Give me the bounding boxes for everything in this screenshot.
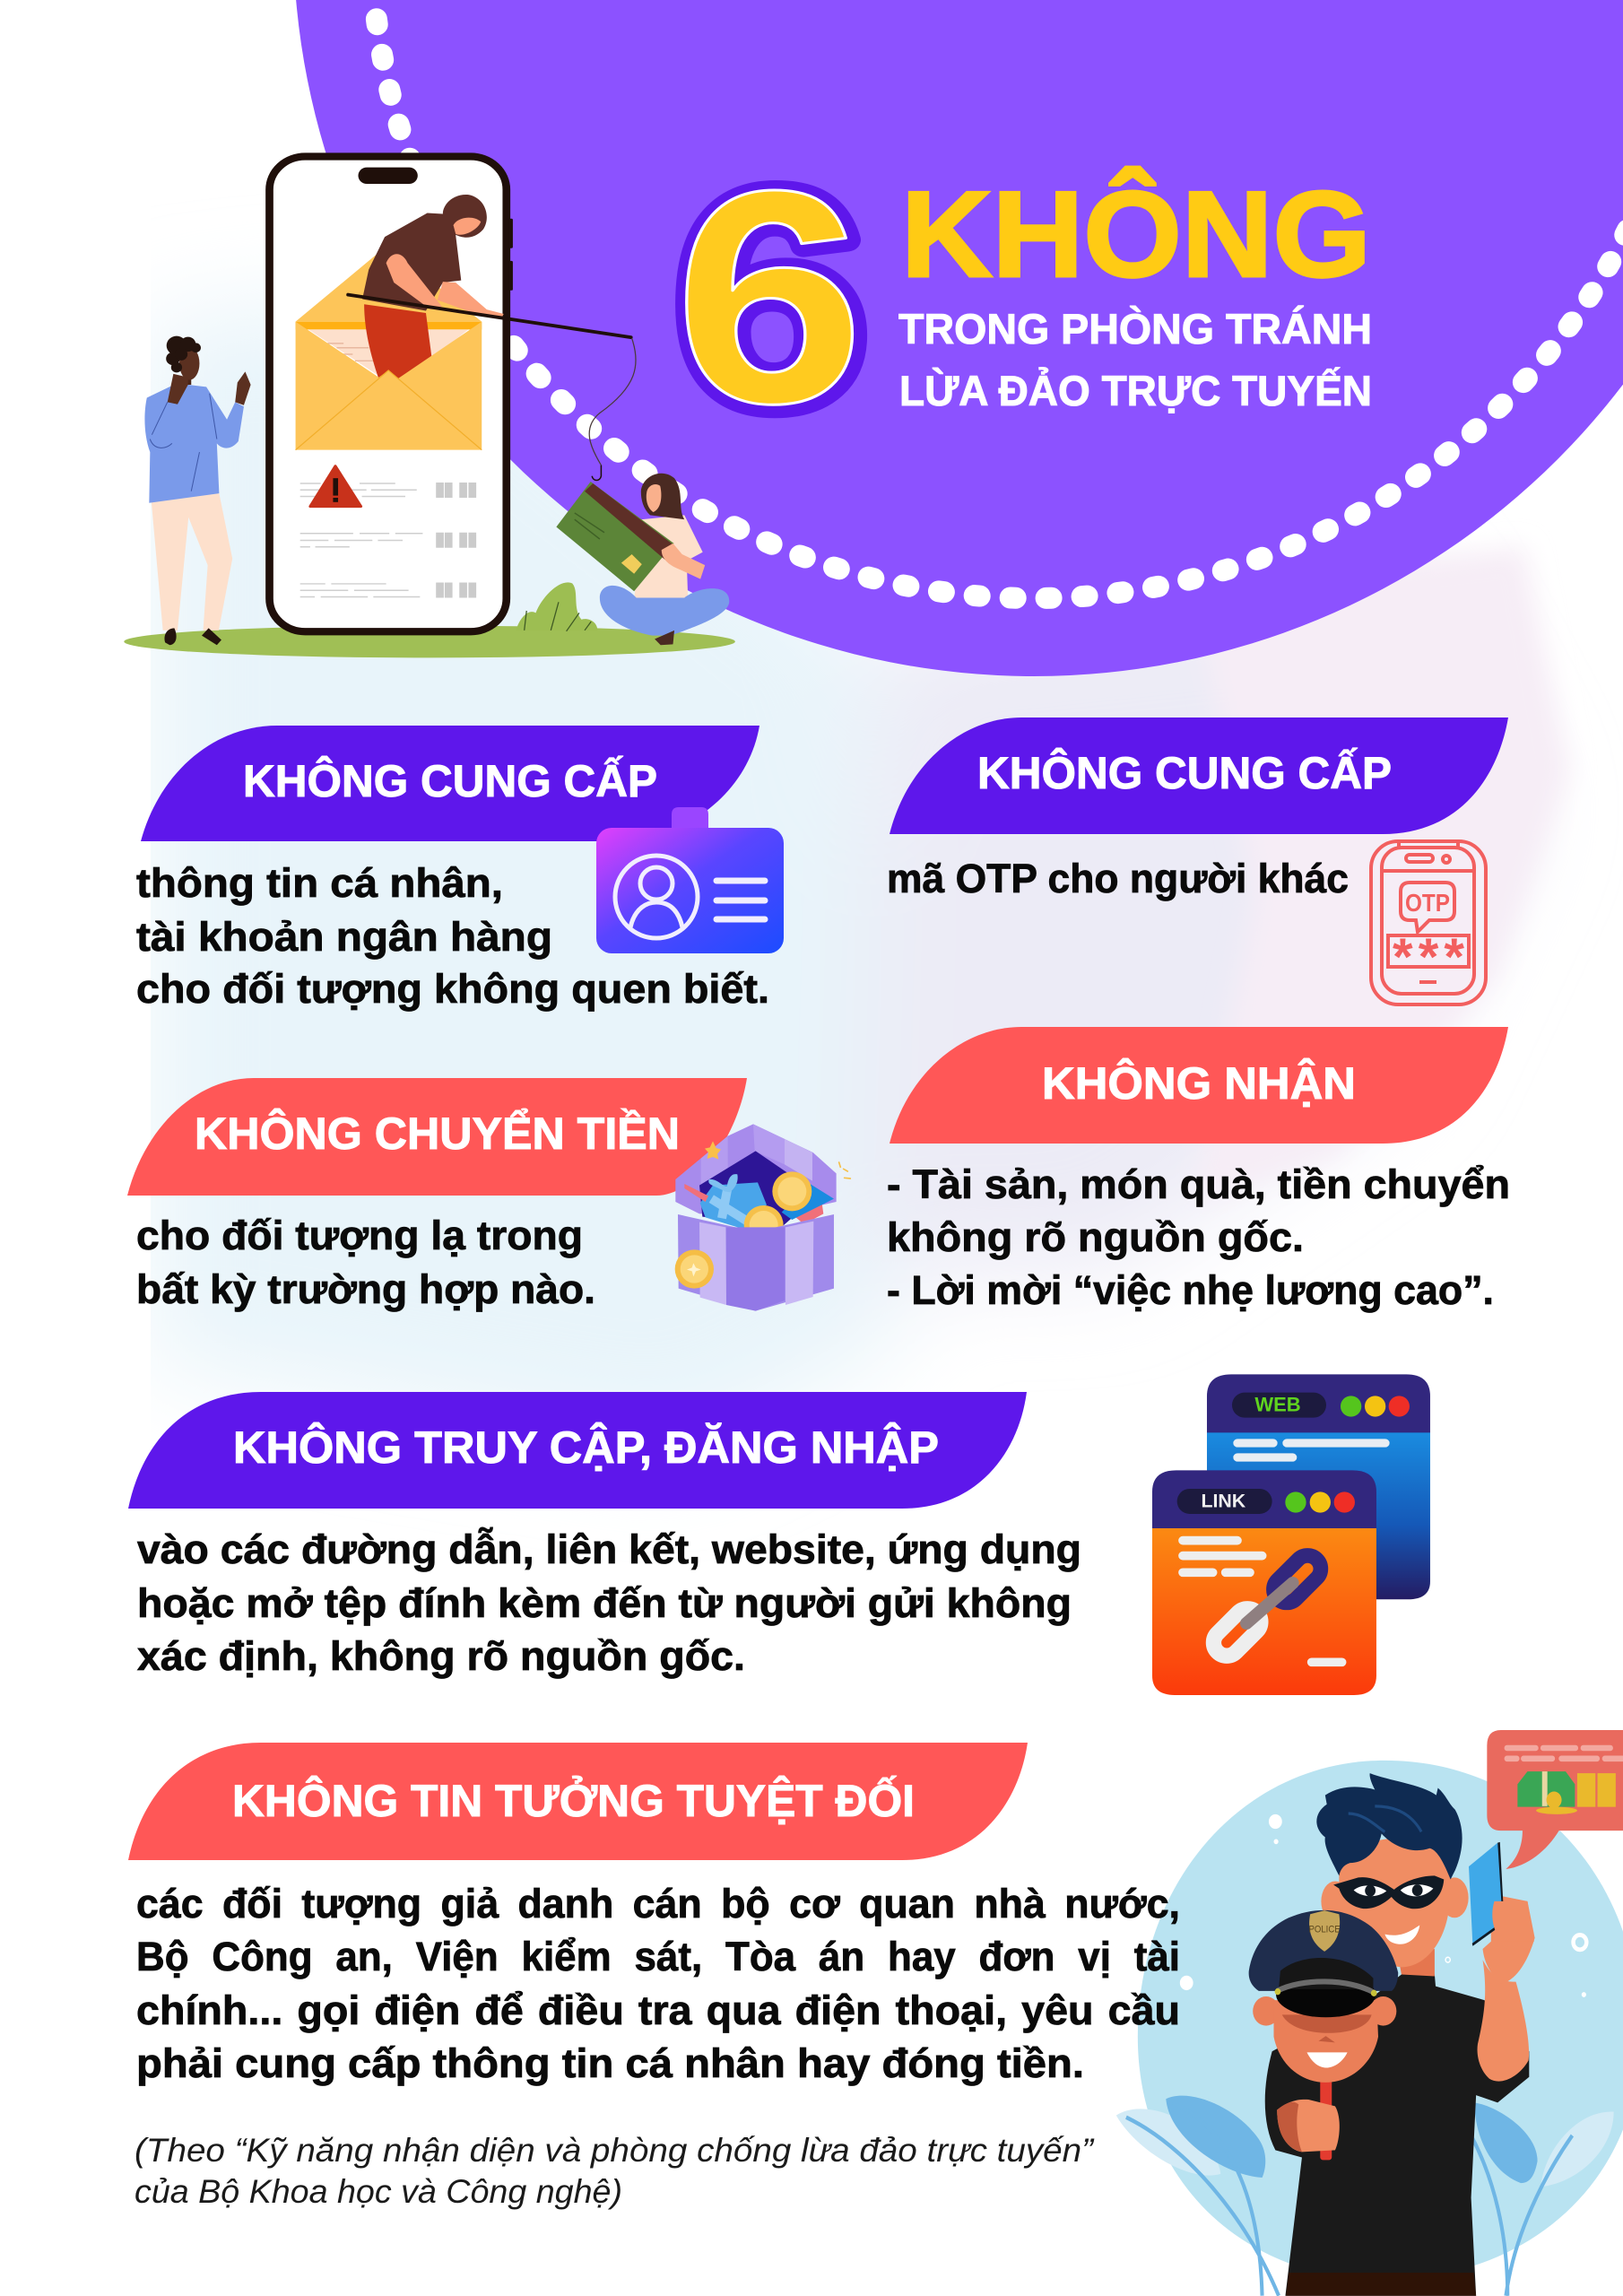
bush (516, 582, 597, 631)
icon: id card (596, 807, 784, 953)
text: chuyển tiền: bất kỳ trường hợp nào. (136, 1266, 595, 1312)
text: chuyển tiền (136, 1213, 595, 1312)
text: không nhận: - Tài sản, món quà, tiền chuyển (887, 1161, 1510, 1207)
hooded scammer (362, 195, 504, 379)
text: truy cập: vào các đường dẫn, liên kết, website, ứng dụng (137, 1526, 1081, 1572)
icon: web and link windows (1152, 1374, 1430, 1695)
text: không tin tưởng: Bộ Công an, Viện kiểm sát, Tòa án hay đơn vị tài (136, 1934, 1180, 1979)
heading: không tin tưởng tuyệt đối: KHÔNG TIN TƯỞNG TUYỆT ĐỐI (232, 1775, 915, 1826)
heading: không chuyển tiền: KHÔNG CHUYỂN TIỀN (195, 1108, 680, 1159)
source citation (135, 2132, 1095, 2210)
icon: OTP phone: *** (1393, 928, 1464, 987)
icon: OTP phone: OTP (1405, 889, 1450, 917)
heading: không cung cấp (personal info) (141, 726, 759, 841)
source citation: của Bộ Khoa học và Công nghệ) (135, 2173, 622, 2210)
title: LỪA ĐẢO TRỰC TUYẾN (899, 367, 1372, 414)
heading: không cung cấp (personal info): KHÔNG CUNG CẤP (243, 755, 657, 806)
back window: WEB (1254, 1393, 1301, 1415)
text: không tin tưởng: chính... gọi điện để điều tra qua điện thoại, yêu cầu (136, 1987, 1180, 2033)
heading: không tin tưởng tuyệt đối (128, 1743, 1028, 1860)
heading: không nhận (890, 1027, 1508, 1144)
leaves (1116, 2096, 1614, 2296)
envelope front (296, 322, 482, 450)
title: KHÔNG (901, 166, 1371, 302)
heading: không nhận: KHÔNG NHẬN (1042, 1057, 1356, 1109)
text: truy cập (137, 1526, 1081, 1679)
illustration: scammer with police mask (1116, 1730, 1623, 2296)
title (898, 166, 1372, 414)
small bubbles (1180, 1814, 1586, 1997)
warning sign (300, 466, 417, 507)
ground (124, 625, 735, 657)
text: không tin tưởng: các đối tượng giả danh cán bộ cơ quan nhà nước, (136, 1881, 1180, 1926)
title: TRONG PHÒNG TRÁNH (898, 305, 1372, 352)
front window: LINK (1201, 1491, 1246, 1512)
text: personal info (136, 860, 769, 1012)
watercolor background (151, 296, 1569, 1453)
grey list rows (300, 483, 476, 597)
text: OTP: mã OTP cho người khác (887, 856, 1349, 901)
icon: OTP phone (1371, 841, 1486, 1004)
text: không nhận (887, 1161, 1510, 1313)
police mask (1249, 1910, 1398, 2160)
front window (1152, 1470, 1376, 1695)
woman with card (556, 474, 729, 645)
icon: gift box (675, 1124, 850, 1311)
heading: không cung cấp (OTP) (890, 718, 1508, 834)
heading: không cung cấp (OTP): KHÔNG CUNG CẤP (977, 747, 1392, 798)
heading: không truy cập, đăng nhập: KHÔNG TRUY CẬP, ĐĂNG NHẬP (233, 1422, 939, 1473)
text: không tin tưởng (136, 1881, 1180, 2086)
text: personal info: tài khoản ngân hàng (136, 914, 552, 960)
source citation: (Theo “Kỹ năng nhận diện và phòng chống lừa đảo trực tuyến” (135, 2132, 1095, 2169)
back window (1207, 1374, 1430, 1599)
text: truy cập: hoặc mở tệp đính kèm đến từ người gửi không (137, 1580, 1072, 1626)
police mask: POLICE (1308, 1925, 1341, 1935)
text: personal info: thông tin cá nhân, (136, 860, 503, 906)
scammer head (1316, 1773, 1469, 1977)
blue circle background (1138, 1761, 1623, 2280)
phone body (270, 156, 513, 631)
text: personal info: cho đối tượng không quen biết. (136, 966, 769, 1012)
big number 6: 6 (674, 128, 864, 466)
heading: không chuyển tiền (127, 1078, 747, 1196)
text: không nhận: không rõ nguồn gốc. (887, 1214, 1304, 1260)
illustration: phishing phone scene (124, 156, 735, 657)
dotted arc (371, 0, 1623, 598)
text: truy cập: xác định, không rõ nguồn gốc. (137, 1633, 745, 1679)
text: không nhận: - Lời mời “việc nhẹ lương cao”. (887, 1267, 1494, 1313)
speech bubble (1487, 1730, 1623, 1869)
envelope back and letter (296, 246, 482, 378)
fishing rod and line (348, 295, 636, 480)
left person (144, 336, 251, 645)
heading: không truy cập, đăng nhập (128, 1392, 1027, 1509)
purple header circle (293, 0, 1623, 676)
text: chuyển tiền: cho đối tượng lạ trong (136, 1213, 583, 1258)
scammer body (1265, 1894, 1535, 2296)
big number 6: 6 (676, 130, 866, 468)
blue smartphone (1469, 1842, 1534, 1946)
text: không tin tưởng: phải cung cấp thông tin cá nhân hay đóng tiền. (136, 2040, 1084, 2086)
